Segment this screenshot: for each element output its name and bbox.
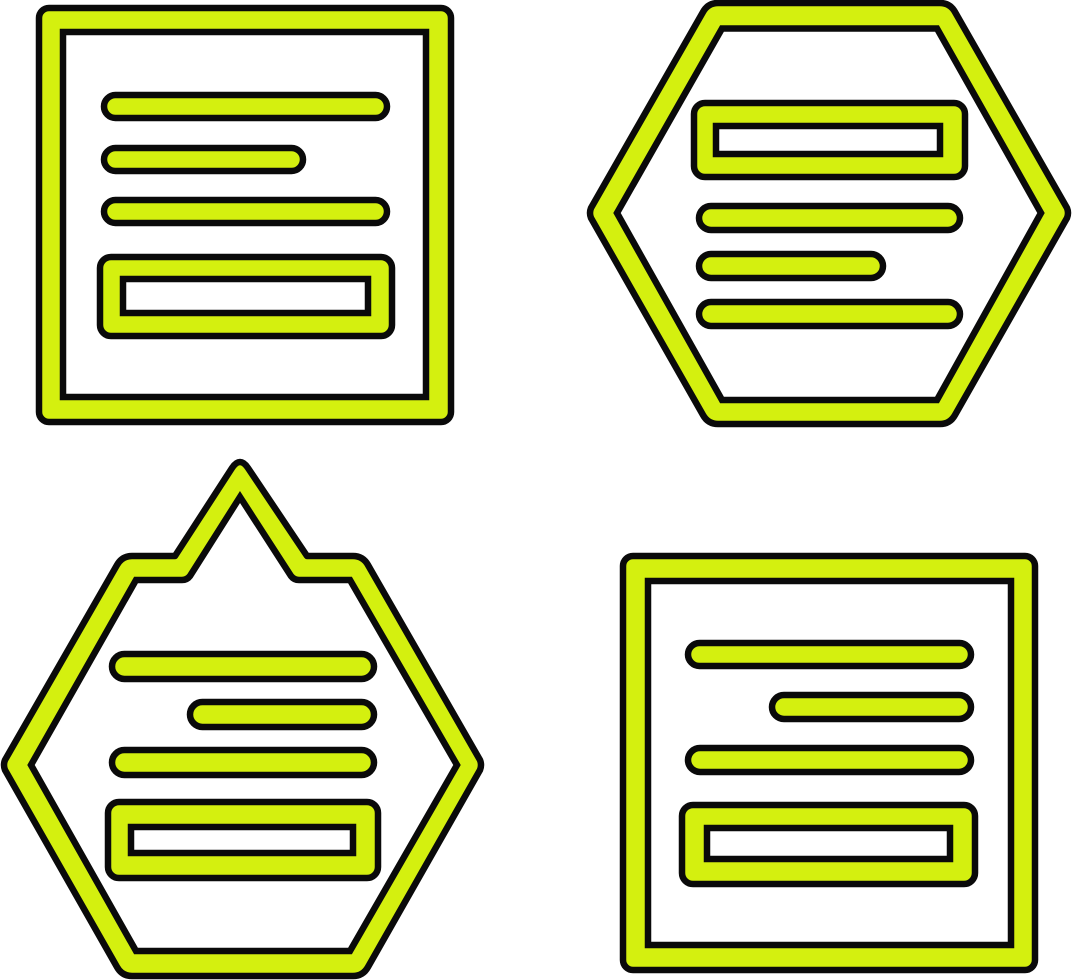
panel: peaked hexagon inner page	[31, 497, 457, 951]
panel: square inner page	[648, 581, 1011, 945]
text line 2	[104, 148, 303, 171]
text line 2	[772, 695, 971, 719]
frame: hexagon outer border	[590, 3, 1068, 424]
text line 1	[112, 654, 374, 679]
frame: square outer border	[623, 556, 1035, 970]
button: input box	[694, 103, 965, 177]
text line 2	[190, 702, 374, 727]
icon: hexagon document, top right	[590, 3, 1068, 424]
icon: square document, bottom right	[623, 556, 1035, 970]
text line 1	[104, 95, 387, 118]
icon: square document, top left	[39, 8, 451, 422]
text line 3	[104, 200, 387, 223]
text line 3	[688, 748, 971, 772]
button: input box	[100, 257, 392, 336]
text line 1	[688, 643, 971, 666]
button: input box	[682, 805, 975, 884]
frame: square outer border	[39, 8, 451, 422]
button: input box	[108, 802, 378, 878]
icon: hexagon document with peak, bottom left	[4, 462, 481, 976]
panel: square inner page	[63, 32, 426, 397]
text line 2	[699, 254, 883, 278]
frame: peaked hexagon outer border	[4, 462, 481, 976]
text line 1	[699, 206, 960, 230]
text line 3	[699, 302, 960, 326]
panel: hexagon inner page	[617, 28, 1041, 400]
text line 3	[112, 750, 374, 775]
